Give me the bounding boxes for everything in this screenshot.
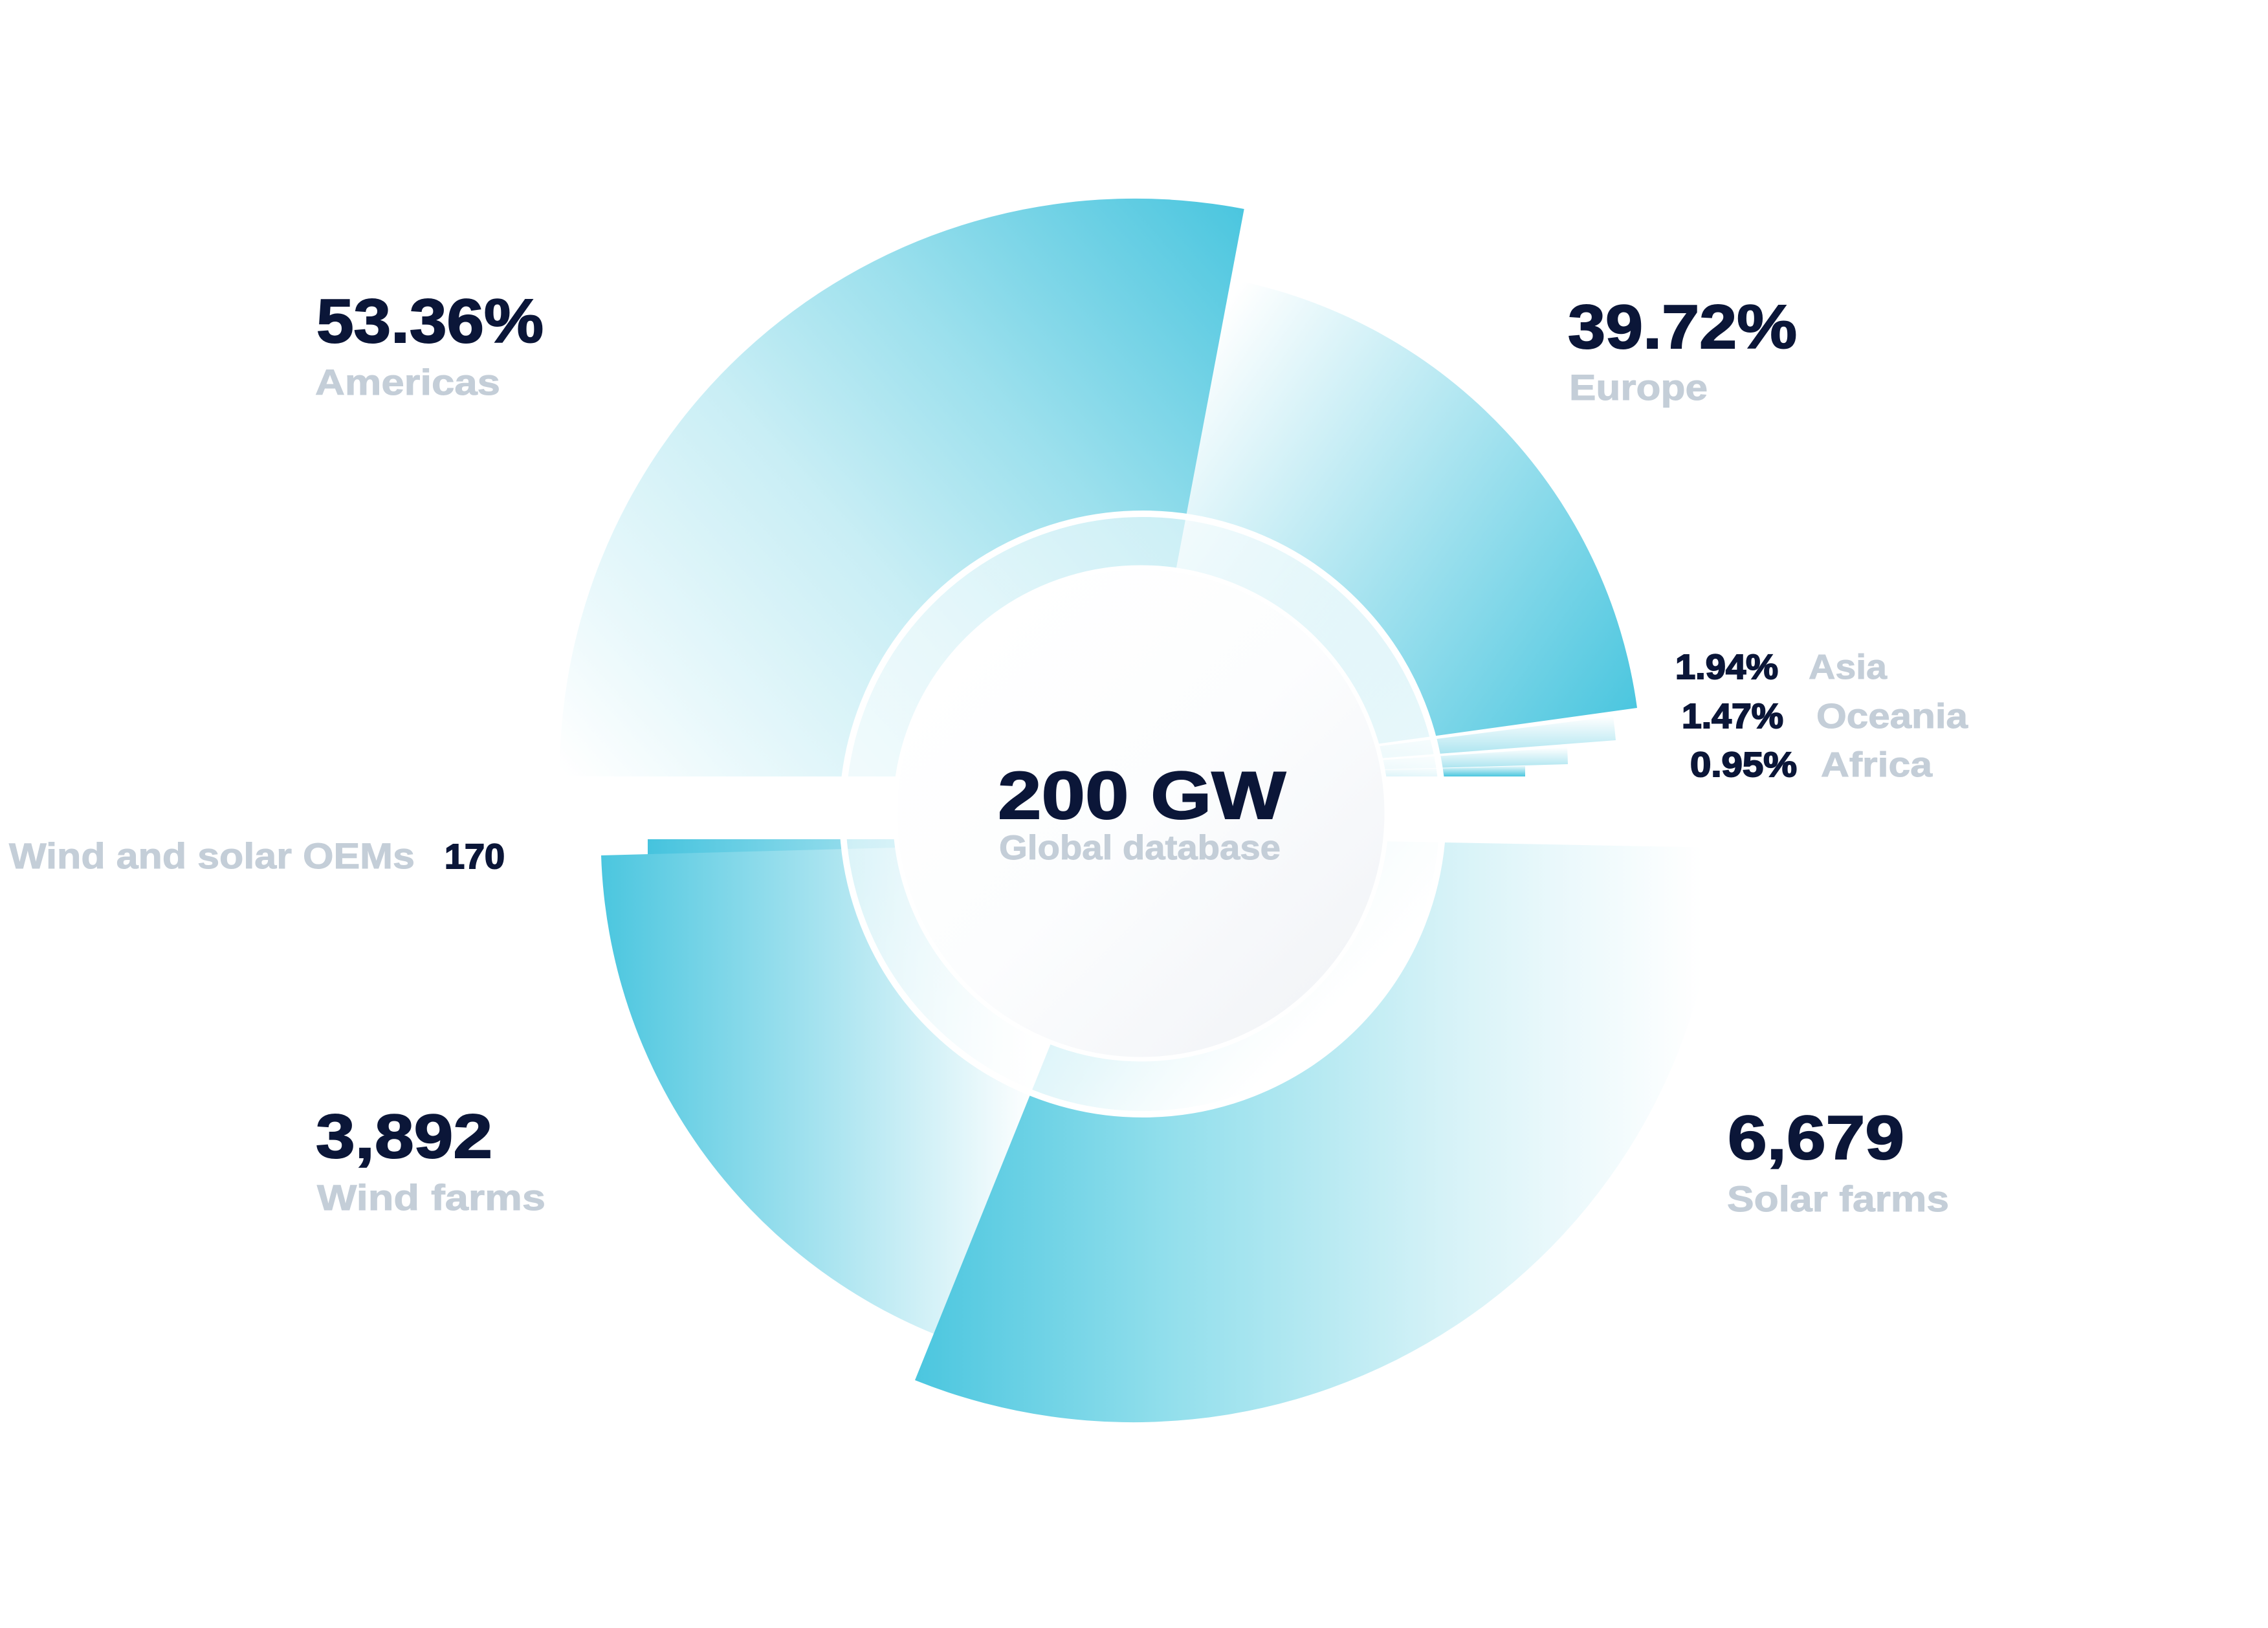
inner disc — [895, 567, 1387, 1059]
label: Solar farms — [1727, 1103, 1949, 1219]
label: Oceania: Oceania — [1816, 697, 1968, 736]
translucent outer ring — [842, 514, 1443, 1114]
sector: Wind farms — [601, 840, 1143, 1338]
label: Africa — [1690, 745, 1933, 784]
label: Africa: 0.95% — [1690, 745, 1797, 784]
label: Wind and solar OEMs: Wind and solar OEMs — [9, 835, 415, 876]
label: Americas: 53.36% — [316, 287, 544, 356]
center value: Global database — [999, 829, 1281, 867]
sector: Europe — [1126, 275, 1637, 776]
label: Wind farms: Wind farms — [317, 1177, 545, 1218]
label: Asia — [1675, 648, 1888, 687]
sector: Americas — [560, 199, 1244, 776]
label: Wind farms — [316, 1102, 545, 1218]
label: Solar farms: Solar farms — [1727, 1178, 1949, 1219]
center value: 200 GW — [998, 758, 1286, 833]
label: Americas: Americas — [315, 362, 500, 402]
label: Wind farms: 3,892 — [316, 1102, 492, 1171]
label: Europe — [1568, 292, 1797, 408]
label: Solar farms: 6,679 — [1728, 1103, 1904, 1172]
sector: Solar farms — [915, 837, 1719, 1422]
label: Oceania — [1682, 697, 1968, 736]
label: Europe: Europe — [1569, 367, 1708, 408]
sector: Oceania — [1143, 747, 1568, 776]
label: Asia: Asia — [1809, 648, 1888, 687]
label: Europe: 39.72% — [1568, 292, 1797, 362]
label: Africa: Africa — [1821, 745, 1933, 784]
label: Oceania: 1.47% — [1682, 697, 1783, 736]
sector: Asia — [1143, 716, 1616, 776]
center value — [998, 758, 1286, 867]
label: Americas — [315, 287, 544, 402]
sector: Wind and solar OEMs — [648, 839, 1143, 861]
label: Wind and solar OEMs: 170 — [445, 837, 505, 876]
label: Asia: 1.94% — [1675, 648, 1778, 687]
sector: Africa — [1143, 766, 1525, 776]
